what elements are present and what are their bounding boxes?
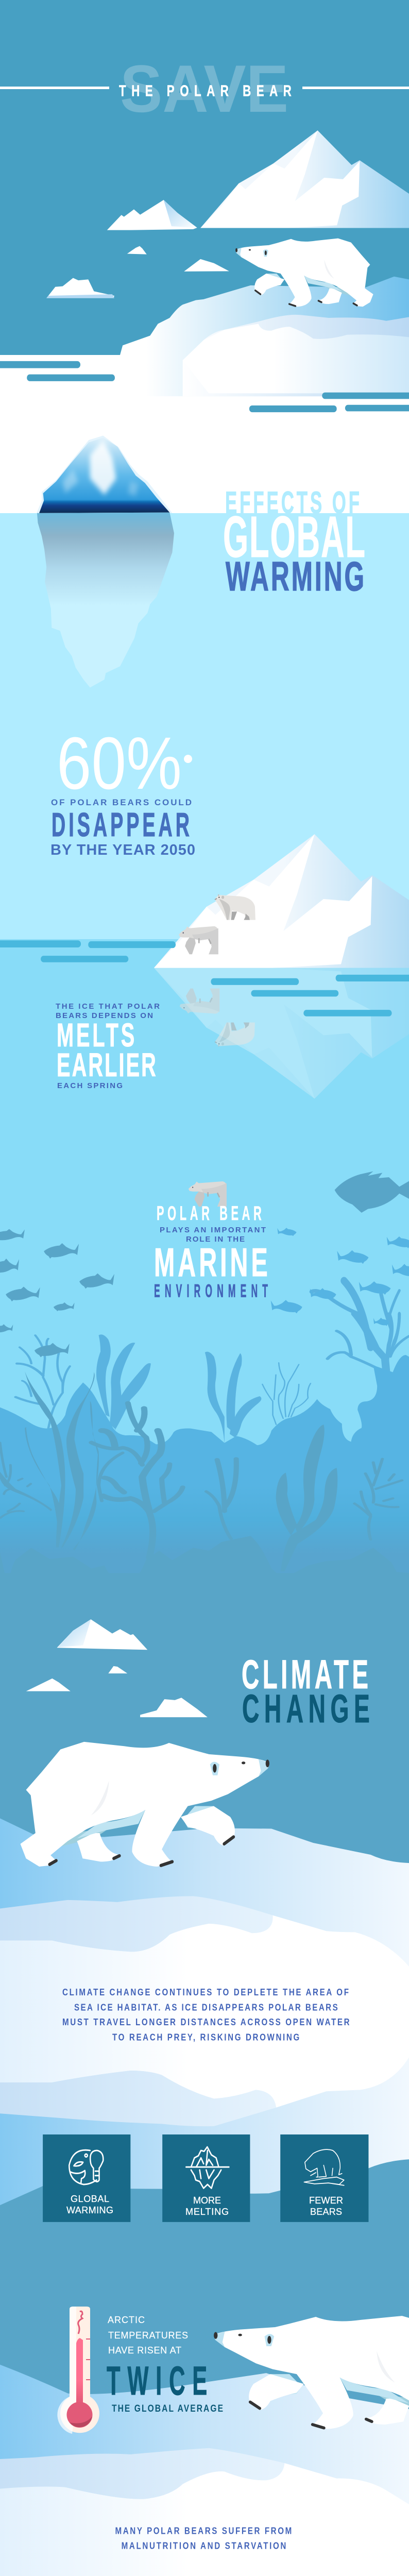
panel 1: arctic scene: [0, 130, 409, 412]
heading: climate change: [242, 1651, 370, 1731]
text: arctic temperatures: [107, 2315, 223, 2414]
text: melts earlier: BEARS DEPENDS ON: [56, 1011, 153, 1020]
text: melts earlier: EARLIER: [57, 1047, 156, 1083]
text: marine environment: MARINE: [154, 1240, 268, 1285]
heading: climate change: CLIMATE: [242, 1651, 368, 1697]
dark kelp and coral: [0, 1371, 402, 1571]
title: SAVE the polar bear: SAVE: [120, 51, 288, 126]
tile: fewer bears: [280, 2134, 368, 2222]
text: marine environment: ROLE IN THE: [186, 1235, 245, 1244]
heading: effects of global warming: EFFECTS OF: [225, 486, 360, 520]
walking polar bear, climate section: [21, 1742, 269, 1867]
text: arctic temperatures: THE GLOBAL AVERAGE: [112, 2402, 223, 2414]
text: melts earlier: MELTS: [57, 1018, 134, 1054]
reflected polar bears: [180, 989, 255, 1047]
ice floe: [120, 277, 409, 396]
text: melts earlier: [56, 1002, 160, 1090]
tile labels: FEWER: [309, 2195, 343, 2206]
water ripples: [0, 940, 409, 1016]
panel 5: ice floe band with text and tiles: [0, 1818, 409, 2222]
text: marine environment: POLAR BEAR: [157, 1201, 262, 1225]
stat: 60 percent: [50, 722, 195, 858]
reflection of the iceberg in water: [154, 968, 409, 1098]
text: arctic temperatures: TWICE: [107, 2358, 207, 2403]
iceberg with polar bears: [154, 834, 409, 968]
text: melts earlier: EACH SPRING: [57, 1081, 123, 1090]
text: arctic temperatures: ARCTIC: [108, 2315, 145, 2325]
sea floor hill, light: [0, 1355, 409, 1573]
polar bear: [235, 239, 373, 307]
heading: effects of global warming: WARMING: [226, 554, 364, 600]
heading: climate change: CHANGE: [242, 1687, 370, 1731]
panel 2: iceberg: [37, 435, 174, 688]
fish in the kelp: [35, 1343, 70, 1357]
text: melts earlier: THE ICE THAT POLAR: [56, 1002, 160, 1011]
panel 3: melting ice and marine life: [0, 834, 409, 1347]
body text: climate change continues: SEA ICE HABITAT. AS ICE DISAPPEARS POLAR BEARS: [74, 2002, 338, 2013]
title: SAVE the polar bear: THE POLAR BEAR: [119, 82, 292, 99]
body text: climate change continues: TO REACH PREY, RISKING DROWNING: [112, 2032, 299, 2043]
tile labels: BEARS: [310, 2207, 342, 2217]
small polar bear: [189, 1181, 227, 1207]
light kelp behind the hill: [15, 1314, 409, 1444]
tile: more melting: [162, 2134, 250, 2222]
title: SAVE the polar bear: [0, 51, 409, 126]
ice floe layers: [0, 1818, 409, 2205]
light fish school: [271, 1228, 409, 1326]
tile: global warming: [43, 2134, 130, 2222]
tile labels: MELTING: [185, 2207, 229, 2217]
heading: effects of global warming: [223, 486, 365, 600]
body text: climate change continues: MUST TRAVEL LONGER DISTANCES ACROSS OPEN WATER: [62, 2017, 350, 2027]
panel 6: floe band, bears: [0, 2365, 409, 2576]
thermometer: [57, 2307, 99, 2434]
water ripples: [0, 361, 409, 412]
text: marine environment: ENVIRONMENT: [154, 1281, 268, 1301]
text: malnutrition: [115, 2526, 292, 2551]
coral tree top, right: [311, 1281, 399, 1347]
stat: 60 percent: BY THE YEAR 2050: [50, 842, 195, 858]
stat: 60 percent: OF POLAR BEARS COULD: [51, 798, 192, 807]
ice floe layers: [0, 2365, 409, 2576]
big fish: [335, 1172, 409, 1213]
walking polar bear, twice section: [214, 2316, 409, 2429]
small icebergs: [26, 1619, 208, 1717]
text: malnutrition: MALNUTRITION AND STARVATION: [122, 2540, 286, 2551]
sea floor with coral: [0, 1314, 409, 1573]
tile labels: [66, 2194, 343, 2217]
text: marine environment: [154, 1201, 268, 1301]
tile labels: WARMING: [66, 2205, 113, 2215]
heading: effects of global warming: GLOBAL: [223, 505, 365, 570]
text: malnutrition: MANY POLAR BEARS SUFFER FROM: [115, 2526, 292, 2536]
text: arctic temperatures: TEMPERATURES: [108, 2330, 188, 2341]
sea floor hill, dark: [0, 1536, 409, 1616]
panel 4: sea bed and small icebergs: [0, 1536, 409, 1717]
stat: 60 percent: 60%: [57, 722, 182, 805]
tile labels: GLOBAL: [71, 2194, 109, 2204]
stat: 60 percent: DISAPPEAR: [52, 807, 190, 844]
icebergs on the horizon: [46, 130, 409, 298]
body text: climate change continues: CLIMATE CHANGE CONTINUES TO DEPLETE THE AREA OF: [62, 1987, 349, 1997]
tile labels: MORE: [193, 2195, 221, 2206]
text: marine environment: PLAYS AN IMPORTANT: [160, 1226, 266, 1234]
iceberg above and below water: [37, 435, 174, 688]
body text: climate change continues: [62, 1987, 350, 2043]
text: arctic temperatures: HAVE RISEN AT: [108, 2345, 181, 2355]
dark fish school: [0, 1229, 114, 1333]
